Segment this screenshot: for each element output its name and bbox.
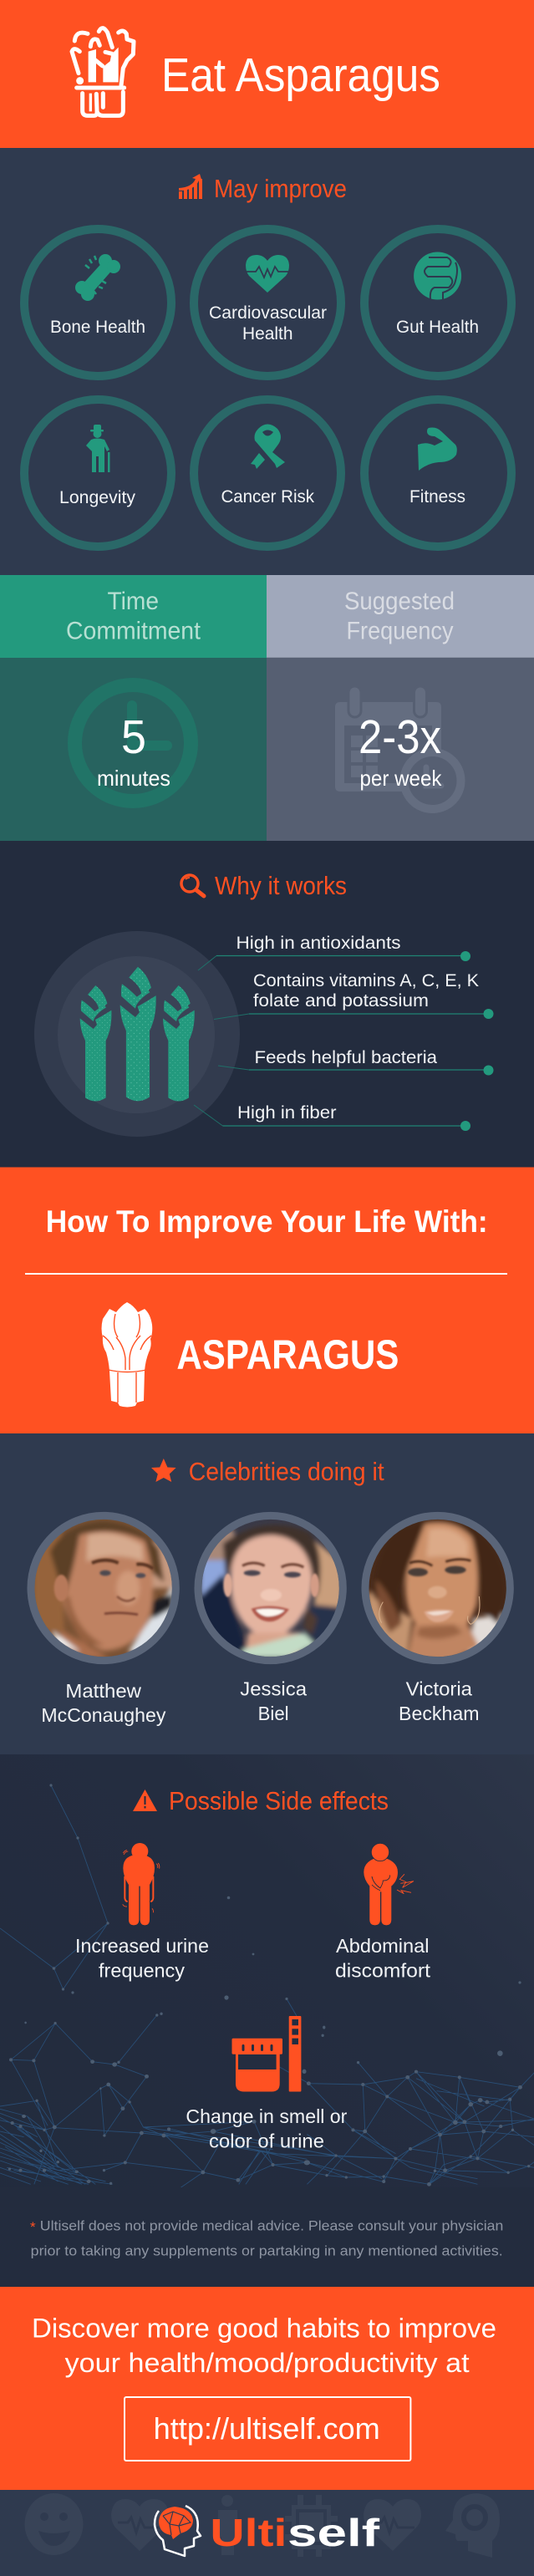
label: increased urine frequency: frequency [99,1959,186,1981]
label: abdominal discomfort: discomfort [335,1959,431,1981]
benefit: cardiovascular health: Health [242,324,292,344]
icon: calendar and clock [335,686,461,809]
button: url [125,2397,410,2461]
name: matthew mcconaughey [41,1680,166,1726]
name: victoria beckham [399,1678,480,1724]
label: change in smell or color [186,2105,348,2151]
name: victoria beckham: Victoria [406,1678,472,1700]
icon: asparagus outline [72,28,134,115]
value: 2-3x per week [359,710,442,791]
name: matthew mcconaughey: McConaughey [41,1704,166,1726]
callout: feeds helpful bacteria: Feeds helpful bacteria [254,1048,437,1067]
heading: time commitment: Time [107,588,159,615]
benefit: gut health: Gut Health [396,318,479,337]
icon: asparagus bundle [102,1302,152,1408]
panel: possible side effects [0,1754,534,2287]
icon: star [151,1459,176,1482]
heading: suggested frequency [344,588,455,645]
label: abdominal discomfort [335,1935,431,1981]
text: discover more: Discover more good habits to improve [32,2314,496,2344]
panel: may improve [0,148,534,575]
value: 2-3x per week: per week [359,766,442,791]
name: matthew mcconaughey: Matthew [65,1680,141,1702]
text: discover more [32,2314,496,2378]
label: change in smell or color: color of urine [209,2130,324,2151]
icon: clock [75,685,191,801]
icon: growth chart [179,174,202,199]
benefit: longevity: Longevity [59,488,135,507]
label: asparagus: ASPARAGUS [176,1332,399,1377]
label: increased urine frequency: Increased urine [75,1935,209,1957]
heading: time commitment: Commitment [66,617,201,645]
label: abdominal discomfort: Abdominal [336,1935,430,1957]
icon: warning triangle [133,1789,157,1811]
heading: why it works: Why it works [215,871,347,900]
logo: wordmark: self [287,2511,380,2554]
photo: jessica biel [198,1515,343,1661]
callout: vitamins [214,971,493,1020]
panel: how to improve banner [0,1167,534,1433]
button: url: http://ultiself.com [154,2411,380,2446]
name: jessica biel [240,1678,307,1724]
panel: celebrities [27,1459,514,1726]
panel: footer [0,2490,534,2576]
logo: wordmark [210,2511,380,2554]
panel: time commitment [0,575,267,841]
heading: time commitment [66,588,201,645]
photo: victoria beckham [365,1515,510,1661]
value: 5 minutes [97,710,170,791]
callout: vitamins: Contains vitamins A, C, E, K [253,971,479,990]
panel: call to action [0,2287,534,2490]
benefit: fitness [364,400,511,547]
callout: high in fiber [194,1103,470,1131]
callout: high in antioxidants: High in antioxidants [236,934,401,953]
icon: magnifier [181,875,204,896]
panel: suggested frequency [267,575,534,841]
title: Eat Asparagus [161,48,440,102]
name: jessica biel: Jessica [240,1678,307,1700]
benefit: cancer risk: Cancer Risk [221,487,314,507]
value: 2-3x per week: 2-3x [359,710,441,764]
value: 5 minutes: minutes [97,766,170,791]
heading: suggested frequency: Suggested [344,588,455,615]
panel: why it works [0,841,534,1168]
logo: ultiself head [155,2506,201,2556]
benefit: fitness: Fitness [409,487,465,507]
name: victoria beckham: Beckham [399,1703,480,1724]
benefit: cancer risk [194,400,341,547]
callout: vitamins: folate and potassium [253,991,429,1011]
benefit: bone health: Bone Health [50,318,145,337]
icon: urine sample cup and test strip [232,2016,301,2091]
logo: wordmark: Ulti [210,2511,287,2554]
value: 5 minutes: 5 [121,710,146,764]
text: discover more: your health/mood/productivity at [65,2348,470,2378]
disclaimer: prior to taking any supplements or partaking in any mentioned activities. [31,2243,503,2259]
icon: person with arms at sides [123,1843,160,1925]
benefit: bone health [24,229,171,376]
benefit: gut health [364,229,511,376]
illustration: asparagus spears [34,931,240,1137]
panel: header [0,0,534,148]
name: jessica biel: Biel [258,1703,289,1724]
disclaimer: Ultiself does not provide medical advice. Please consult your physician [40,2218,503,2234]
heading: how to improve: How To Improve Your Life With: [46,1204,488,1239]
callout: high in antioxidants [198,934,470,970]
disclaimer: * [30,2219,36,2235]
heading: suggested frequency: Frequency [346,617,453,645]
icon: person with abdominal pain [364,1843,414,1925]
heading: may improve: May improve [214,174,347,203]
benefit: cardiovascular health: Cardiovascular [209,303,327,323]
label: increased urine frequency [75,1935,209,1981]
photo: matthew mcconaughey [31,1515,181,1661]
label: change in smell or color: Change in smell or [186,2105,348,2127]
benefit: cardiovascular health [194,229,341,376]
heading: possible side effects: Possible Side effects [169,1786,389,1815]
benefit: longevity [24,400,171,547]
heading: celebrities doing it: Celebrities doing it [189,1457,384,1486]
disclaimer [30,2218,503,2259]
footer background icons [25,2493,500,2558]
callout: high in fiber: High in fiber [237,1103,336,1123]
callout: feeds helpful bacteria [218,1048,493,1075]
